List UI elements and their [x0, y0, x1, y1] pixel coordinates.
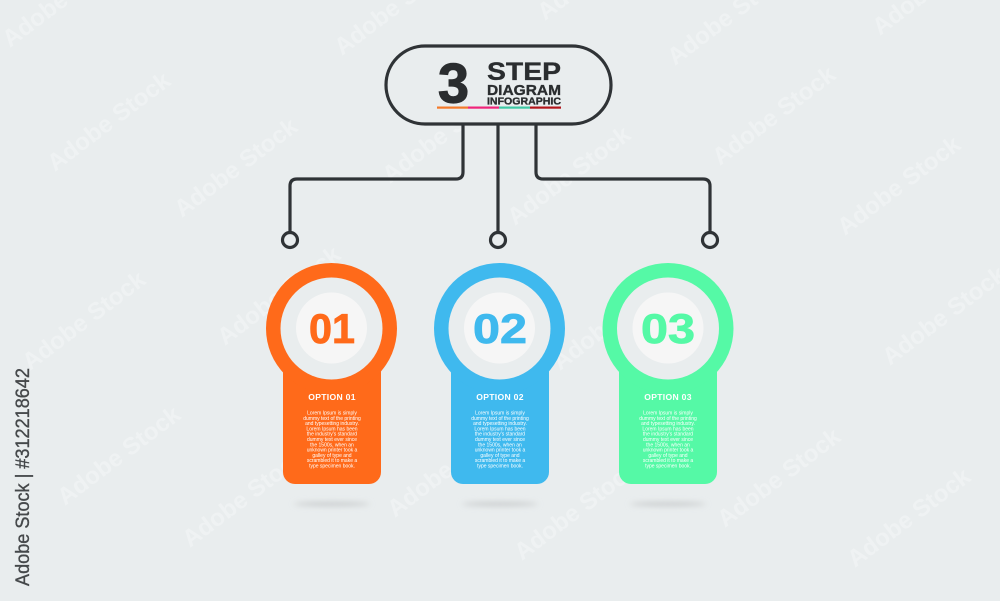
watermarks: Adobe Stock: [52, 401, 186, 511]
option 02 card: [434, 263, 565, 506]
option 03 card: Lorem Ipsum is simply: [643, 410, 693, 416]
option 03 card: [602, 263, 734, 506]
option 01 card: galley of type and: [312, 453, 352, 459]
title words: INFOGRAPHIC: [487, 95, 561, 107]
option 01 card: dummy text of the printing: [303, 416, 361, 422]
watermarks: Adobe Stock: [707, 61, 841, 171]
option 02 card: Lorem Ipsum has been: [474, 426, 526, 432]
option 02 card: and typesetting industry.: [473, 421, 527, 427]
stock label: Adobe Stock | #312218642: [12, 368, 34, 586]
option 01 card: Lorem Ipsum is simply: [307, 410, 357, 416]
option 01 card: the industry's standard: [307, 432, 357, 438]
title pill: [386, 46, 611, 124]
option 02 card: type specimen book.: [477, 464, 523, 470]
option 03 card: 03: [641, 305, 695, 352]
watermarks: Adobe Stock: [502, 121, 636, 231]
option 03 card: the industry's standard: [643, 432, 693, 438]
option 03 card: OPTION 03: [644, 392, 692, 402]
title words: [487, 58, 561, 107]
title colour bar: [437, 106, 561, 109]
option 03 card: the 1500s, when an: [646, 442, 690, 448]
option 02 card: galley of type and: [480, 453, 520, 459]
option 01 card: the 1500s, when an: [310, 442, 354, 448]
watermarks: Adobe Stock: [382, 413, 516, 523]
title words: STEP: [487, 58, 561, 86]
watermarks: Adobe Stock: [509, 456, 643, 566]
option 01 card: and typesetting industry.: [305, 421, 359, 427]
option 03 card: Lorem Ipsum has been: [642, 426, 694, 432]
option 02 card: the industry's standard: [475, 432, 525, 438]
option 03 card: dummy text ever since: [643, 437, 693, 443]
option 01 card: type specimen book.: [309, 464, 355, 470]
option 02 card: OPTION 02: [476, 392, 524, 402]
option 03 card: type specimen book.: [645, 464, 691, 470]
watermarks: Adobe Stock: [212, 241, 346, 351]
option 01 card: OPTION 01: [308, 392, 356, 402]
watermarks: Adobe Stock: [547, 266, 681, 376]
watermarks: Adobe Stock: [712, 423, 846, 533]
option 01 card: 01: [309, 305, 355, 352]
title words: DIAGRAM: [487, 82, 561, 99]
watermarks: Adobe Stock: [832, 131, 966, 241]
option 03 card: unknown printer took a: [643, 448, 694, 454]
option 02 card: dummy text of the printing: [471, 416, 529, 422]
option 03 card: dummy text of the printing: [639, 416, 697, 422]
connector lines: [282, 124, 718, 248]
option 01 card: dummy text ever since: [307, 437, 357, 443]
option 03 card: scrambled it to make a: [643, 458, 693, 464]
option 01 card: Lorem Ipsum has been: [306, 426, 358, 432]
option 01 card: [266, 263, 397, 506]
option 02 card: Lorem Ipsum is simply: [475, 410, 525, 416]
option 02 card: the 1500s, when an: [478, 442, 522, 448]
option 01 card: scrambled it to make a: [307, 458, 357, 464]
watermarks: Adobe Stock: [177, 443, 311, 553]
title number 3: 3: [438, 52, 469, 114]
option 02 card: 02: [473, 305, 527, 352]
option 03 card: and typesetting industry.: [641, 421, 695, 427]
watermarks: Adobe Stock: [377, 79, 511, 189]
option 01 card: unknown printer took a: [307, 448, 358, 454]
watermarks: Adobe Stock: [17, 266, 151, 376]
watermarks: Adobe Stock: [169, 113, 303, 223]
option 02 card: scrambled it to make a: [475, 458, 525, 464]
option 03 card: galley of type and: [648, 453, 688, 459]
watermarks: Adobe Stock: [842, 463, 976, 573]
option 02 card: unknown printer took a: [475, 448, 526, 454]
watermarks: Adobe Stock: [42, 67, 176, 177]
option 02 card: dummy text ever since: [475, 437, 525, 443]
